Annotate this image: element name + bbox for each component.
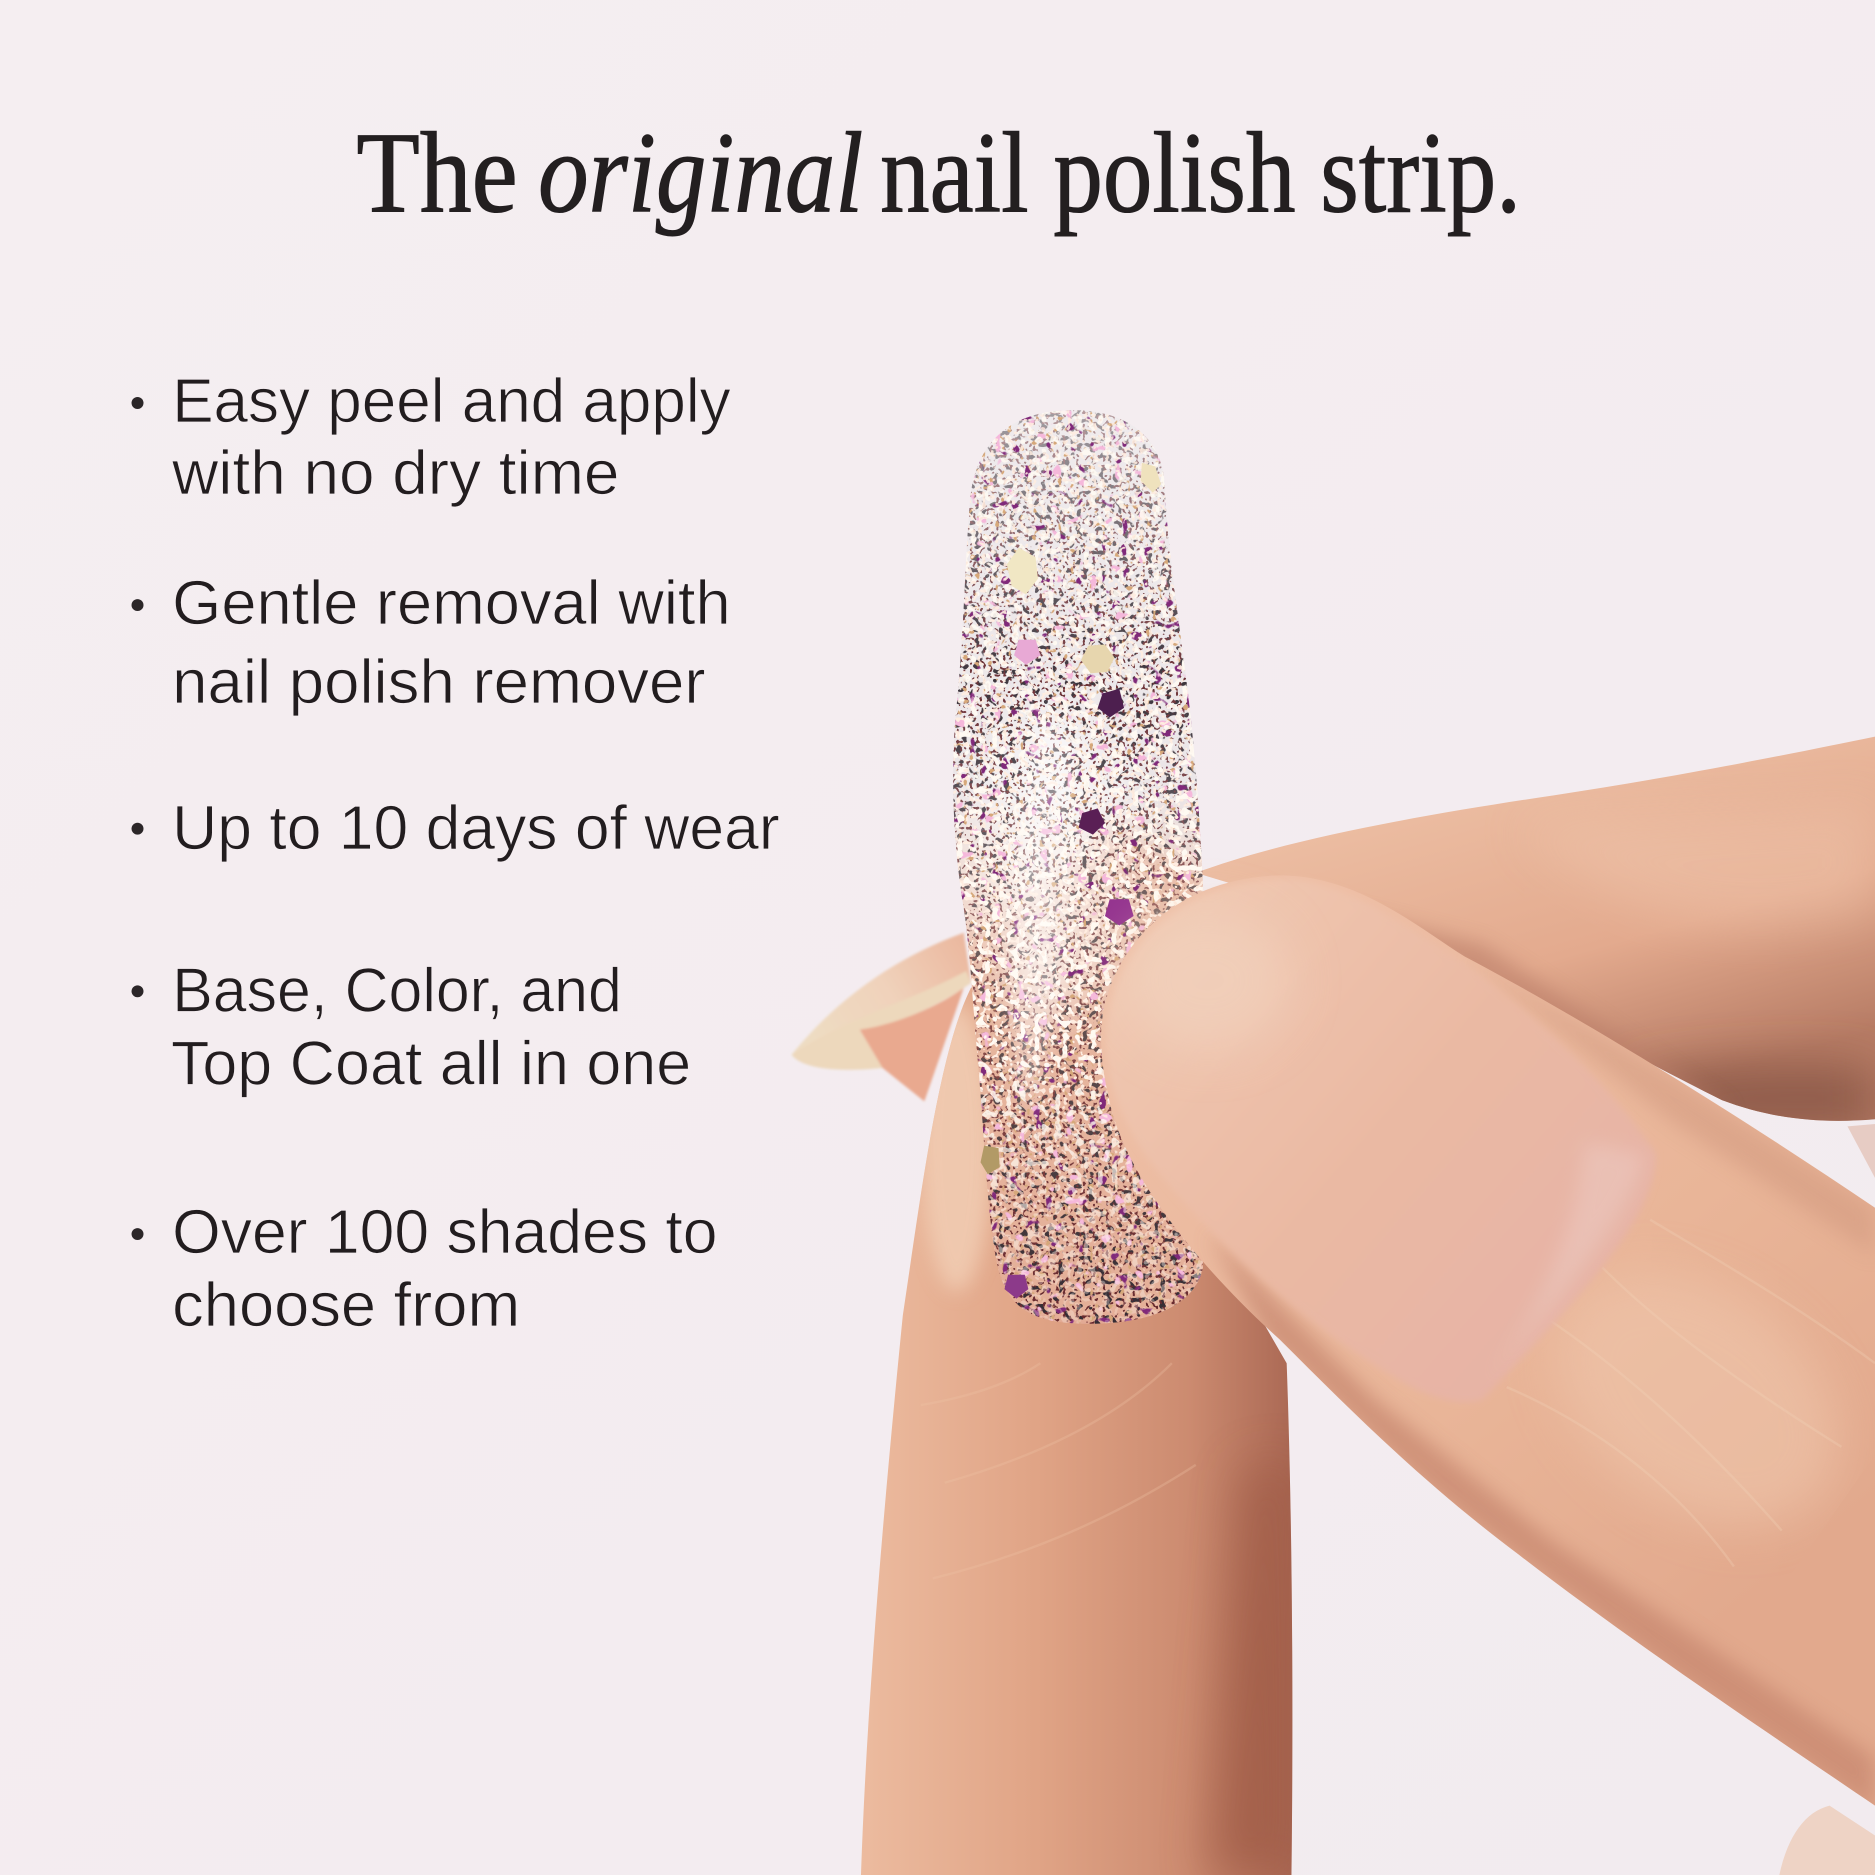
title (356, 110, 1521, 238)
thumbnail (1106, 879, 1656, 1402)
large glitter flakes (981, 463, 1161, 1299)
bullet: easy peel: Easy peel and apply (172, 367, 731, 436)
nail strip (953, 410, 1203, 1324)
glitter (953, 410, 1203, 1324)
bullet: all in one: Base, Color, and (172, 957, 622, 1026)
free nail tip (792, 933, 971, 1101)
index finger (861, 957, 1292, 1875)
nail showing through strip (957, 706, 1208, 1327)
far right background finger (1847, 1124, 1875, 1178)
thumbnail highlight (1124, 909, 1291, 1052)
bullet: gentle removal (132, 569, 731, 717)
strip base (953, 410, 1203, 1324)
bullet: shades (132, 1198, 717, 1340)
feature bullet list (132, 367, 780, 1340)
thumbnail lunula (1483, 1142, 1644, 1387)
bullet: shades: Over 100 shades to (172, 1198, 717, 1267)
bullet: easy peel (132, 367, 731, 508)
title: nail polish strip. (880, 110, 1521, 238)
bullet: gentle removal: Gentle removal with (172, 569, 731, 638)
thumb (1101, 875, 1875, 1812)
bullet: wear time: Up to 10 days of wear (172, 794, 780, 863)
photo: fingers holding strip (792, 395, 1875, 1875)
bullet: all in one: Top Coat all in one (171, 1030, 691, 1099)
bottom corner finger (1779, 1806, 1875, 1875)
thumb skin creases (1507, 1220, 1875, 1566)
rear finger (1196, 737, 1875, 1130)
title: The (356, 110, 518, 238)
bullet: all in one (132, 957, 691, 1099)
title: original (538, 110, 863, 238)
thumb edge shading (1208, 1232, 1875, 1812)
bullet: shades: choose from (172, 1271, 520, 1340)
bullet: easy peel: with no dry time (171, 439, 619, 508)
bullet: gentle removal: nail polish remover (172, 648, 706, 717)
